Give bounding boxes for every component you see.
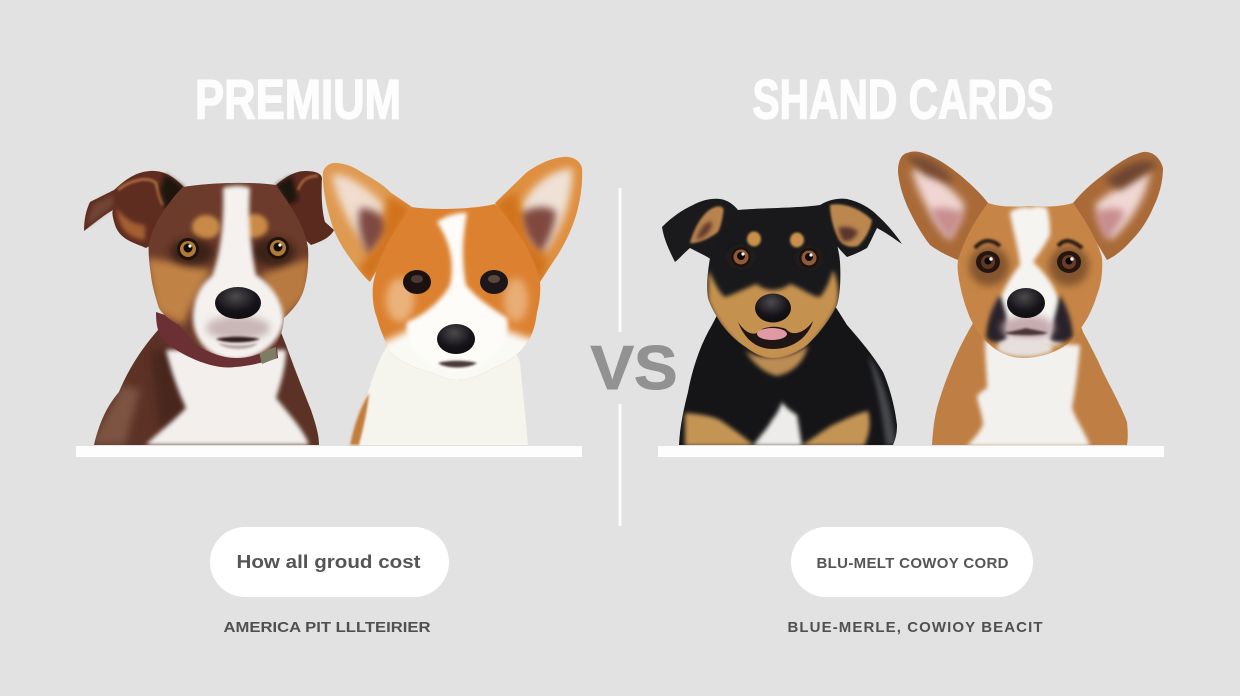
left eye [976,251,1000,273]
tan right cheek [260,258,312,320]
center divider top [618,188,622,332]
head [372,204,540,380]
right ear [820,199,902,257]
left eye [731,247,751,267]
right brow [1058,241,1082,248]
right ear [495,156,582,282]
right white shelf [658,446,1164,457]
nose [755,294,791,322]
right eye [267,237,289,259]
white blaze and muzzle [995,206,1064,345]
dog: brown and white terrier with collar [84,171,334,450]
muzzle shading [1002,315,1054,341]
nose [1007,288,1045,318]
collar [156,312,278,367]
vs label: VS [590,334,678,403]
body [932,323,1128,445]
infographic canvas [76,78,1164,634]
left ear [662,199,738,262]
right caption: BLUE-MERLE, COWIOY BEACIT [788,619,1042,636]
light orange left cheek [386,278,414,322]
heading: shand cards: SHAND CARDS [752,68,1054,130]
tan right brow [242,214,268,238]
right eye [480,270,508,294]
tan face markings [708,270,838,364]
pale lower face [383,326,532,380]
left brow spot [747,232,761,246]
right eye [799,248,819,268]
white chest [967,340,1090,446]
mouth [438,361,477,368]
left ear [84,171,184,248]
tan left brow [192,215,220,239]
left caption: AMERICA PIT LLLTEIRIER [224,619,431,636]
tongue [757,328,787,340]
right pill label [791,527,1033,597]
nose [437,324,475,354]
left brow [975,241,1000,248]
nose [215,287,261,319]
right ear [276,171,334,245]
tan fringe beneath chin [745,345,808,376]
body [94,330,319,445]
black muzzle right [1050,295,1073,342]
collar tag [259,347,277,364]
mouth [1004,328,1048,335]
light orange right cheek [504,278,528,322]
head [145,180,315,362]
center divider bottom [618,404,622,526]
eye surrounds [730,252,752,262]
right ear [1073,152,1163,260]
white blaze and muzzle [193,186,284,360]
right brow spot [790,232,804,248]
left eye patch [969,246,1009,286]
head [958,203,1102,358]
left ear [898,152,988,260]
right eye socket [251,238,295,266]
mouth [216,337,260,342]
orange shoulder [350,393,369,445]
black muzzle left [986,295,1008,342]
body [679,307,897,445]
left eye socket [170,239,214,265]
body [350,325,528,445]
left pill label: How all groud cost [236,552,420,572]
right eye surround [798,246,820,264]
chin [997,339,1053,357]
left white shelf [76,446,582,457]
right pill label: BLU-MELT COWOY CORD [816,555,1009,572]
heading: premium: PREMIUM [195,68,401,130]
left eye [177,238,199,260]
dog: black and tan [662,199,902,450]
muzzle shading [206,316,270,340]
white blaze and muzzle [403,210,512,338]
left ear [322,162,412,282]
lower lip [218,343,258,349]
dog: tan and white big ears [895,148,1168,450]
head [707,205,840,358]
right eye [1057,251,1081,273]
left eye [403,270,431,294]
tan left cheek [146,258,212,325]
right eye patch [1049,246,1089,286]
dog: orange and white corgi type [320,150,590,445]
left pill label [210,527,449,597]
open mouth [738,321,813,349]
